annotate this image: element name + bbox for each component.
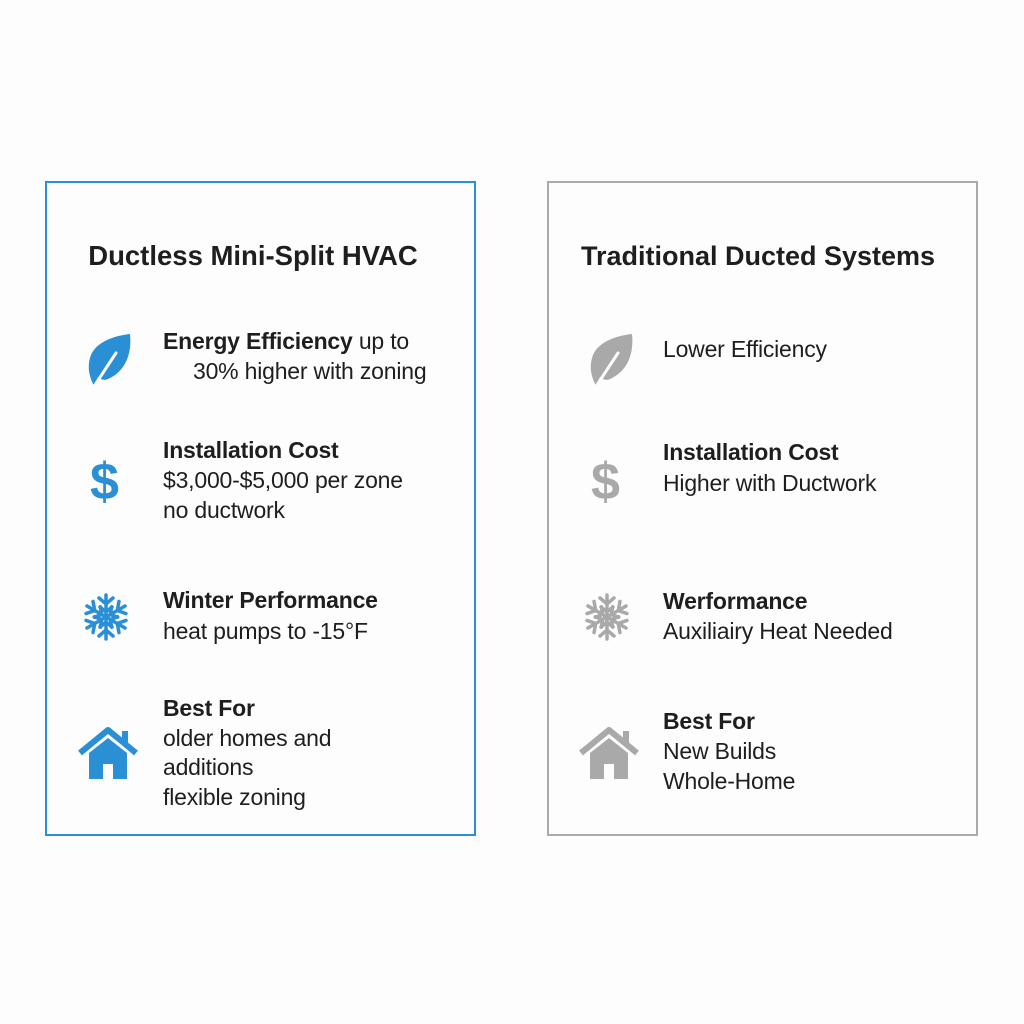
- text: best for right: New Builds: [663, 738, 776, 764]
- text: energy efficiency: 30% higher with zoning: [193, 358, 426, 384]
- text: energy efficiency: Energy Efficiency up to: [163, 328, 409, 354]
- text: best for: [163, 695, 331, 810]
- text: installation cost: [163, 437, 403, 523]
- text: best for: additions: [163, 754, 253, 780]
- icon: snowflake blue: [84, 593, 128, 641]
- heading: traditional: Traditional Ducted Systems: [581, 241, 935, 271]
- text: best for right: Best For: [663, 708, 755, 734]
- icon: snowflake grey: [585, 593, 629, 641]
- panel: ductless mini-split: [45, 181, 476, 836]
- icon: dollar grey: $: [591, 453, 620, 511]
- text: werformance: Werformance: [663, 588, 807, 614]
- text: energy efficiency: [163, 328, 426, 384]
- text: winter performance: [163, 587, 378, 644]
- text: winter performance: Winter Performance: [163, 587, 378, 613]
- text: installation cost right: Installation Cost: [663, 439, 839, 465]
- icon: leaf grey: [590, 334, 632, 385]
- text: installation cost right: Higher with Ductwork: [663, 470, 876, 496]
- text: installation cost: Installation Cost: [163, 437, 339, 463]
- text: installation cost right: [663, 439, 876, 496]
- text: werformance: [663, 588, 893, 644]
- text: best for right: [663, 708, 795, 794]
- text: installation cost: $3,000-$5,000 per zone: [163, 467, 403, 493]
- icon: house blue: [78, 726, 138, 779]
- text: installation cost: no ductwork: [163, 497, 285, 523]
- text: lower efficiency: Lower Efficiency: [663, 336, 827, 362]
- text: werformance: Auxiliairy Heat Needed: [663, 618, 893, 644]
- text: winter performance: heat pumps to -15°F: [163, 618, 368, 644]
- heading: ductless: Ductless Mini-Split HVAC: [88, 240, 418, 271]
- icon: leaf blue: [88, 334, 130, 385]
- icon: house grey: [579, 726, 639, 779]
- text: best for: Best For: [163, 695, 255, 721]
- icon: dollar blue: $: [90, 453, 119, 511]
- panel: traditional ducted: [547, 181, 978, 836]
- text: best for: older homes and: [163, 724, 331, 750]
- text: best for right: Whole-Home: [663, 768, 795, 794]
- text: best for: flexible zoning: [163, 784, 306, 810]
